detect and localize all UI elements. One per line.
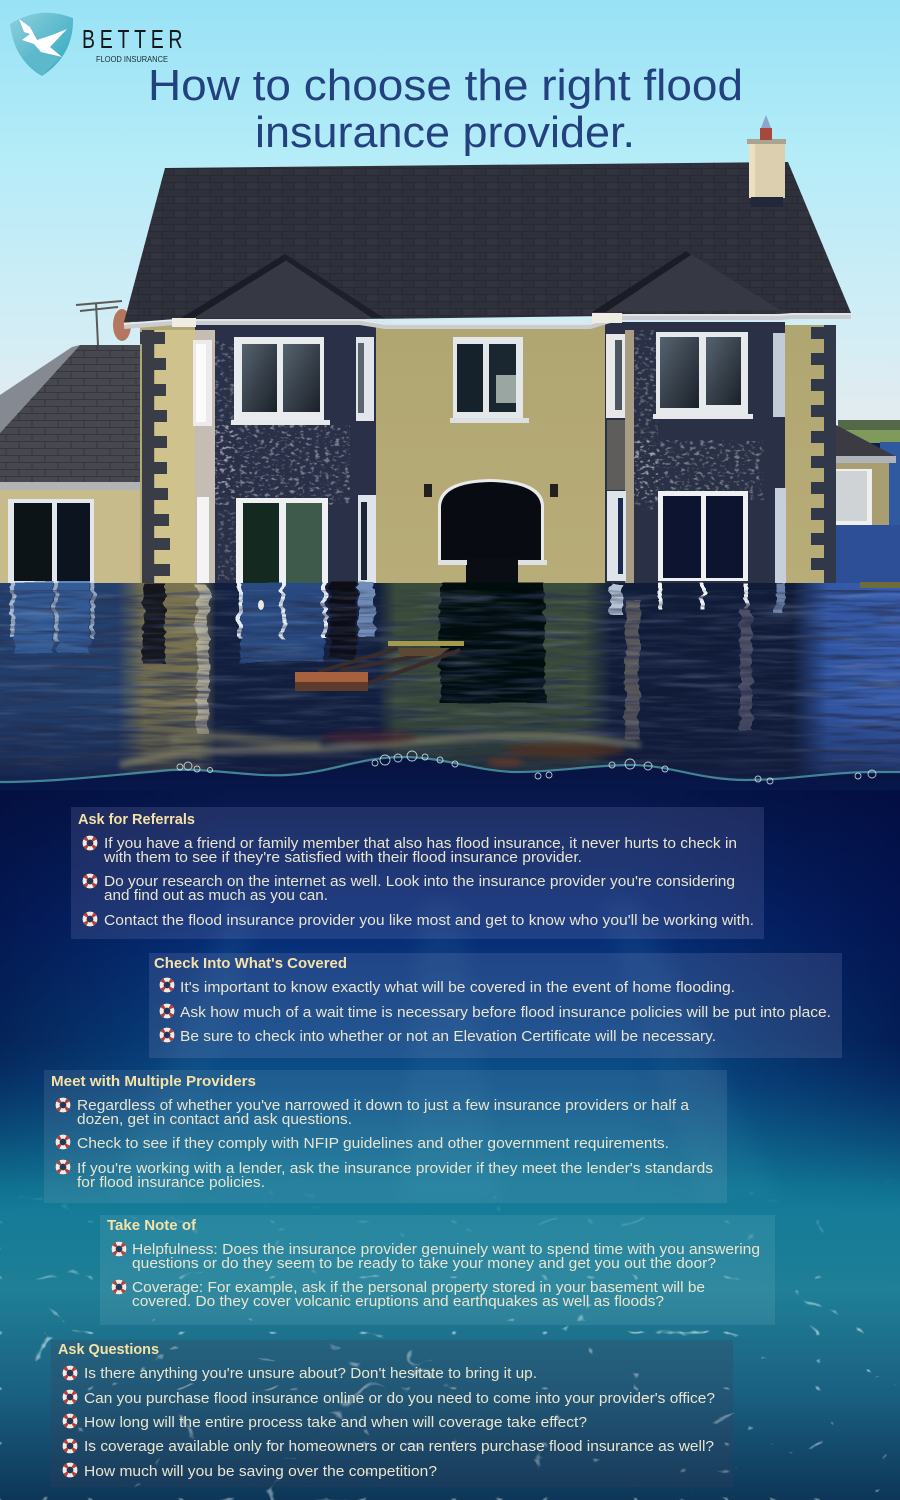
- panel: take note of: [100, 1215, 775, 1325]
- icon: shield with dove: [10, 13, 73, 76]
- icon: life ring: [159, 1003, 175, 1019]
- title: How to choose the right flood: [148, 61, 743, 110]
- quoins right: [811, 325, 836, 587]
- heading: check into what's covered: Check Into What's Covered: [154, 956, 347, 972]
- sky background: [0, 0, 900, 440]
- icon: life ring: [111, 1241, 127, 1257]
- icon: life ring: [82, 835, 98, 851]
- icon: life ring: [55, 1159, 71, 1175]
- title: insurance provider.: [255, 108, 635, 157]
- icon: life ring: [55, 1134, 71, 1150]
- panel: check into what's covered: [149, 953, 842, 1058]
- text: note bullet 2: [132, 1280, 705, 1310]
- arched door: [424, 479, 558, 588]
- ripples: [0, 590, 900, 790]
- oil-like colour bands: [120, 731, 640, 766]
- text: referral bullet 1: with them to see if they're satisfied with their flood insurance provider.: [103, 850, 582, 866]
- flood water: [0, 582, 900, 795]
- right wing and garage: [836, 425, 896, 525]
- logo tagline: FLOOD INSURANCE: [96, 54, 168, 64]
- text: providers bullet 3: If you're working with a lender, ask the insurance provider if they meet the lender's standards: [77, 1161, 713, 1177]
- text: note bullet 1: Helpfulness: Does the insurance provider genuinely want to spend time with you answering: [132, 1242, 760, 1258]
- floating wooden pallet: [295, 641, 464, 691]
- upper windows: [193, 332, 785, 426]
- panel: meet with multiple providers: [44, 1070, 727, 1203]
- logo: [10, 13, 187, 76]
- text: providers bullet 1: Regardless of whether you've narrowed it down to just a few insurance providers or half a: [77, 1098, 690, 1114]
- aerial and satellite dish: [76, 301, 131, 345]
- text: note bullet 1: questions or do they seem to be ready to take your money and get you out the door?: [132, 1256, 716, 1272]
- text: note bullet 2: Coverage: For example, ask if the personal property stored in your basement will be: [132, 1280, 705, 1296]
- text: covered bullet 1: It's important to know exactly what will be covered in the event of home flooding.: [180, 980, 735, 996]
- text: question 4: Is coverage available only for homeowners or can renters purchase flood insurance as well?: [84, 1439, 714, 1455]
- icon: life ring: [82, 911, 98, 927]
- stone bays: [195, 325, 376, 587]
- title: [148, 61, 743, 157]
- text: providers bullet 1: [77, 1098, 690, 1128]
- heading: meet with multiple providers: Meet with Multiple Providers: [51, 1074, 256, 1090]
- icon: life ring: [111, 1279, 127, 1295]
- icon: life ring: [159, 977, 175, 993]
- icon: life ring: [62, 1462, 78, 1478]
- text: note bullet 1: [132, 1242, 760, 1272]
- text: providers bullet 3: for flood insurance policies.: [77, 1175, 265, 1191]
- heading: ask questions: Ask Questions: [58, 1342, 159, 1358]
- text: referral bullet 2: [104, 874, 735, 904]
- gutters: [124, 313, 851, 327]
- text: covered bullet 3: Be sure to check into whether or not an Elevation Certificate will be necessary.: [180, 1029, 716, 1045]
- text: question 5: How much will you be saving over the competition?: [84, 1464, 437, 1480]
- text: question 2: Can you purchase flood insurance online or do you need to come into your provider's office?: [84, 1391, 715, 1407]
- text: referral bullet 2: and find out as much as you can.: [104, 888, 328, 904]
- icon: life ring: [62, 1413, 78, 1429]
- logo wordmark: BETTER: [82, 24, 187, 54]
- panel: ask for referrals: [71, 807, 764, 939]
- icon: life ring: [62, 1389, 78, 1405]
- house: [0, 115, 896, 588]
- floating debris: [860, 582, 900, 588]
- text: referral bullet 3: Contact the flood insurance provider you like most and get to know who you'll be working with.: [104, 913, 754, 929]
- text: referral bullet 1: [103, 836, 737, 866]
- icon: life ring: [55, 1097, 71, 1113]
- icon: life ring: [159, 1027, 175, 1043]
- walls: [140, 325, 836, 587]
- distant shoreline: [836, 420, 900, 592]
- underwater background: [0, 751, 900, 1500]
- heading: take note of: Take Note of: [107, 1218, 196, 1234]
- quoins left: [140, 330, 170, 586]
- text: providers bullet 2: Check to see if they comply with NFIP guidelines and other government requirements.: [77, 1136, 669, 1152]
- text: referral bullet 1: If you have a friend or family member that also has flood insurance, it never hurts to check in: [104, 836, 737, 852]
- panel: ask questions: [51, 1340, 733, 1487]
- icon: life ring: [62, 1365, 78, 1381]
- text: note bullet 2: covered. Do they cover volcanic eruptions and earthquakes as well as floods?: [132, 1294, 664, 1310]
- chimney: [747, 115, 786, 207]
- lower windows: [197, 488, 786, 588]
- heading: ask for referrals: Ask for Referrals: [78, 812, 195, 828]
- text: providers bullet 1: dozen, get in contact and ask questions.: [77, 1112, 352, 1128]
- text: covered bullet 2: Ask how much of a wait time is necessary before flood insurance policies will be put into place.: [180, 1005, 831, 1021]
- icon: life ring: [82, 873, 98, 889]
- text: referral bullet 2: Do your research on the internet as well. Look into the insurance provider you're considering: [104, 874, 735, 890]
- icon: life ring: [62, 1438, 78, 1454]
- left wing: [0, 345, 146, 586]
- text: question 1: Is there anything you're unsure about? Don't hesitate to bring it up.: [84, 1366, 537, 1382]
- house reflections: [10, 583, 785, 740]
- text: question 3: How long will the entire process take and when will coverage take effect?: [84, 1415, 587, 1431]
- text: providers bullet 3: [77, 1161, 713, 1191]
- main roof: [120, 162, 852, 324]
